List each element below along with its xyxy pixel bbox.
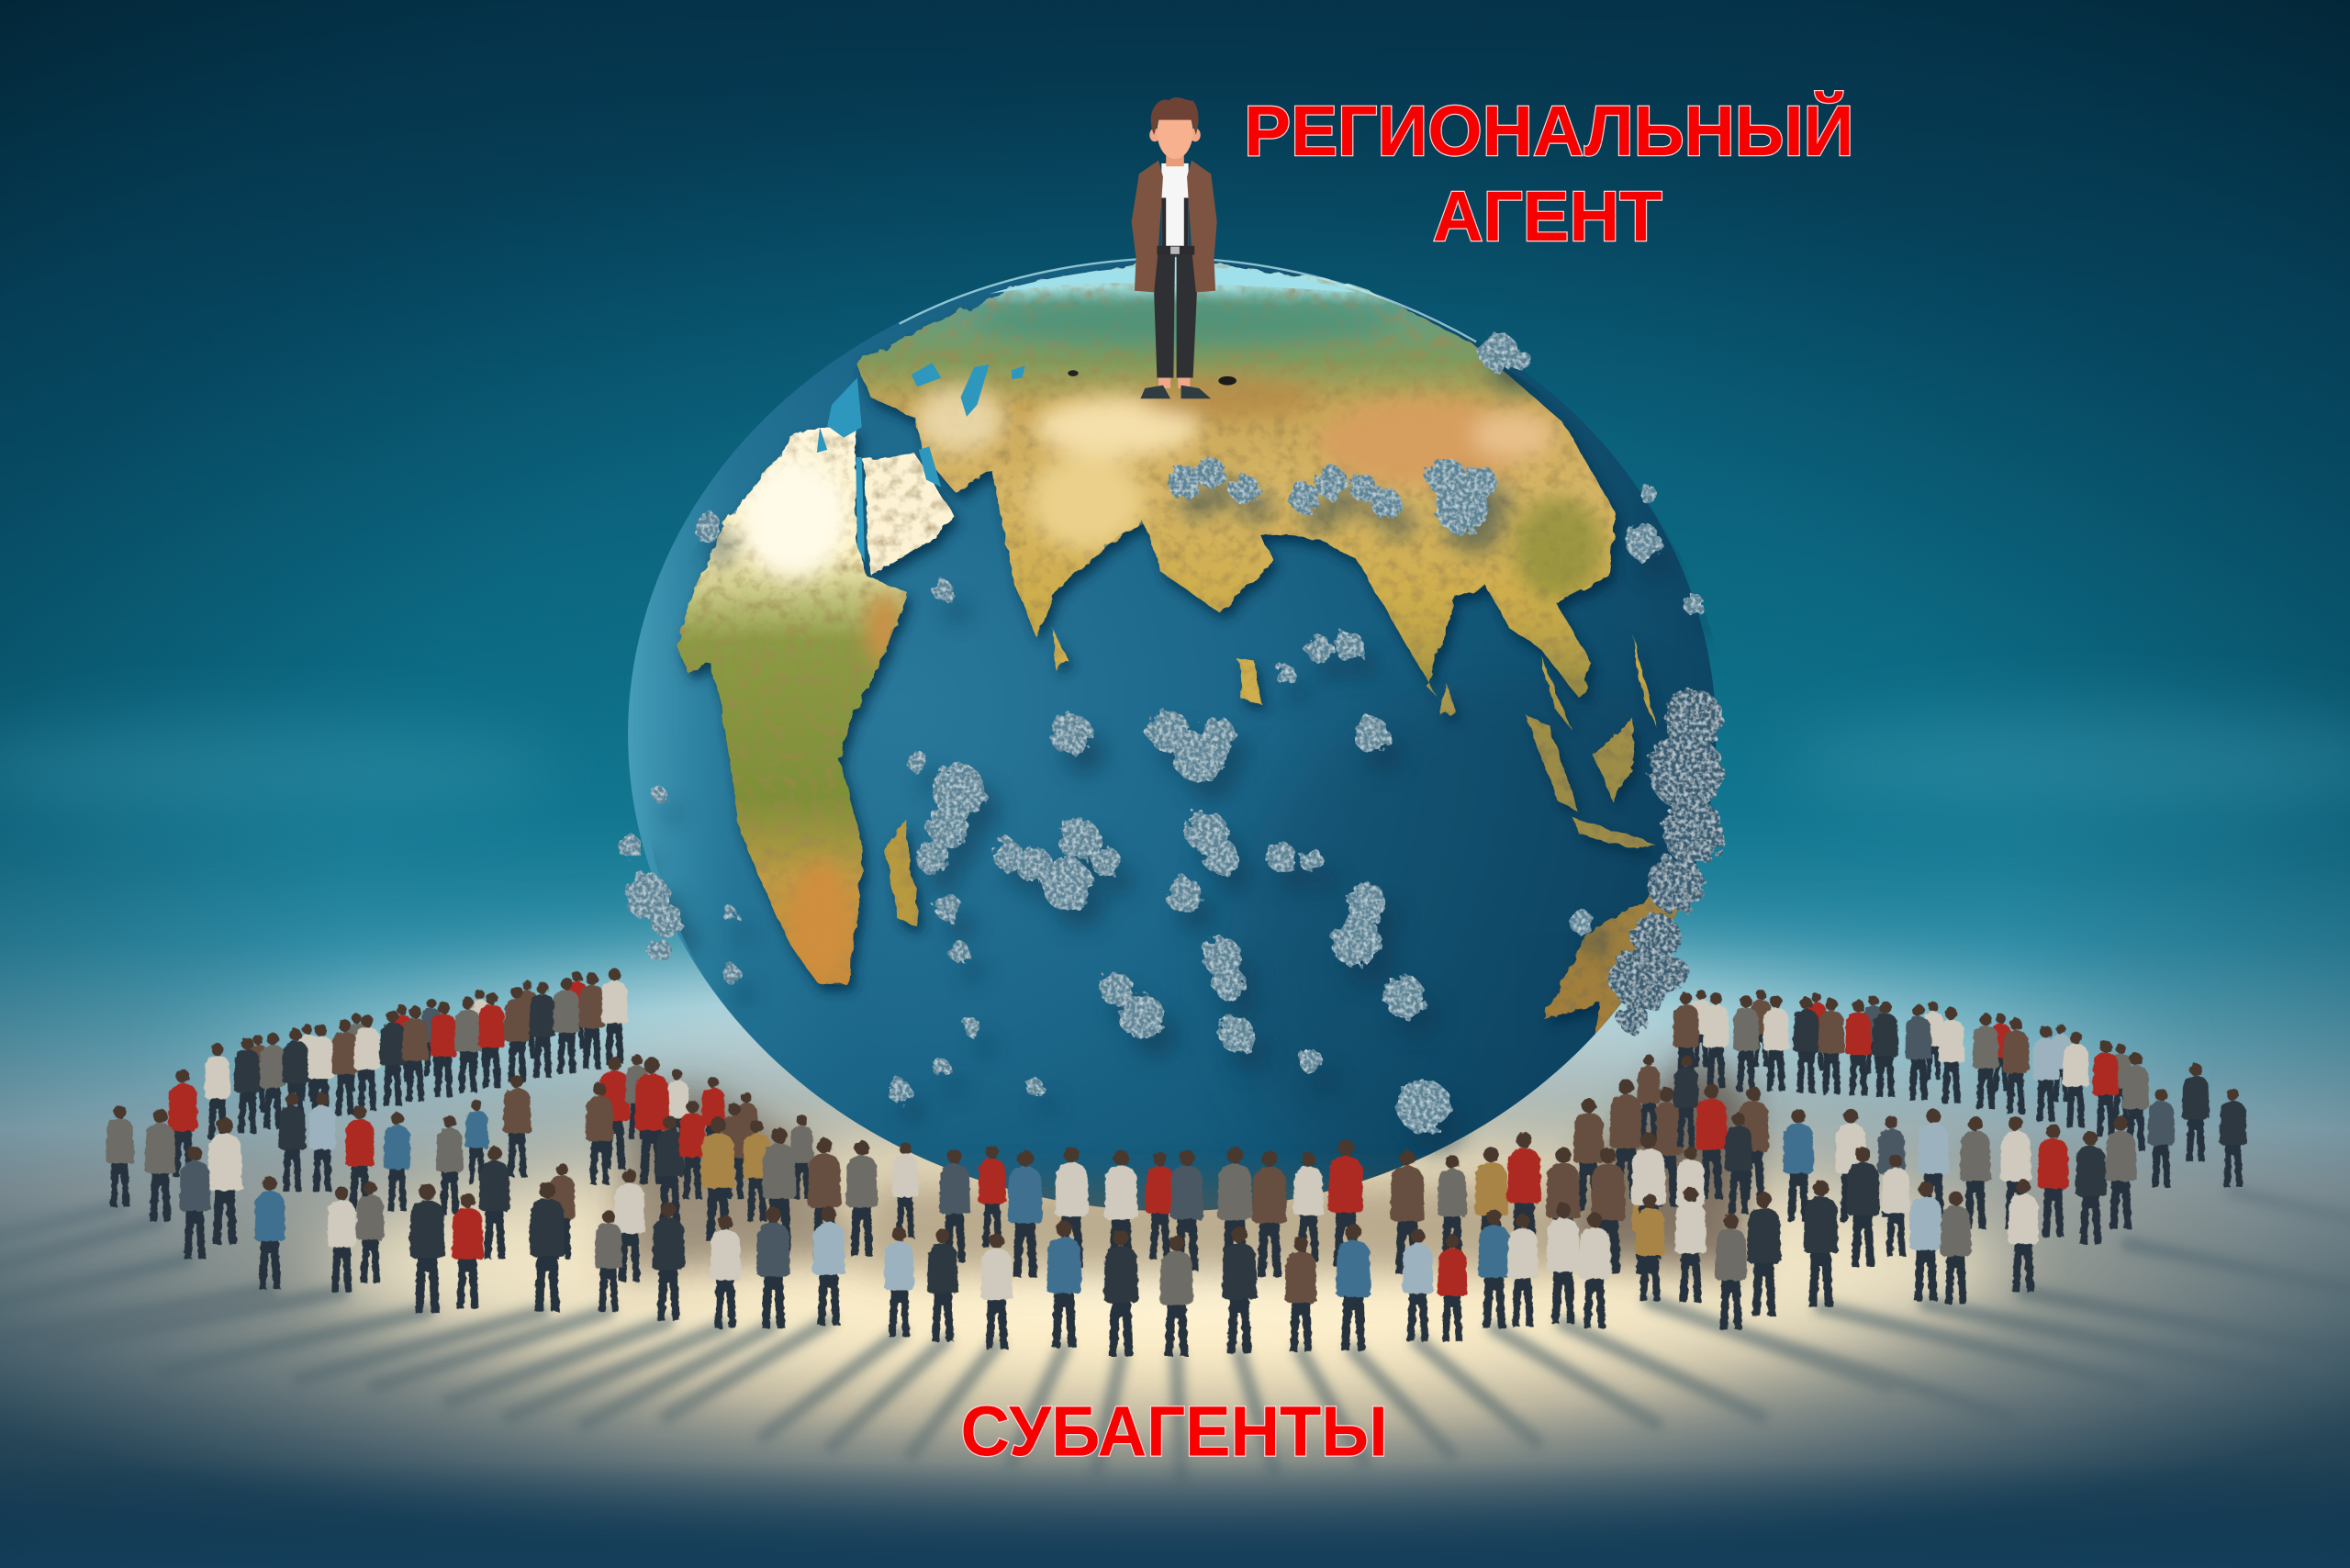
title: regional agent bbox=[1244, 92, 1854, 256]
front row bbox=[254, 1147, 2039, 1357]
jacket bbox=[1132, 161, 1217, 292]
back row right bbox=[1673, 992, 2247, 1187]
middle ring right bbox=[1573, 1055, 2136, 1274]
title: regional agent: АГЕНТ bbox=[1433, 178, 1662, 256]
Arabian peninsula bbox=[863, 454, 955, 576]
back row left bbox=[204, 969, 628, 1139]
globe bbox=[618, 258, 1798, 1244]
land colour patches Africa bbox=[741, 457, 902, 981]
Madagascar bbox=[884, 818, 920, 929]
clouds bbox=[618, 332, 1704, 1133]
belt bbox=[1157, 246, 1194, 255]
floor light pool under the crowd bbox=[330, 1154, 2009, 1379]
continents bbox=[676, 258, 1696, 1045]
rim clouds right bbox=[1609, 689, 1725, 1035]
dense crowd masses bbox=[614, 1049, 1753, 1274]
crowd of subagents bbox=[106, 969, 2247, 1357]
neck bbox=[1166, 150, 1184, 166]
title: regional agent: РЕГИОНАЛЬНЫЙ bbox=[1244, 92, 1854, 171]
suspenders bbox=[1161, 198, 1189, 249]
Africa bbox=[676, 429, 908, 986]
Eurasia bbox=[856, 258, 1616, 712]
top rim highlight bbox=[900, 258, 1476, 342]
sphere shading bbox=[1229, 675, 1798, 1244]
white shirt bbox=[1161, 163, 1189, 249]
globe sphere bbox=[628, 258, 1716, 1211]
Australia bbox=[1544, 877, 1682, 1045]
radial shadows of the crowd bbox=[0, 1192, 2350, 1476]
Indonesia islands bbox=[1526, 634, 1696, 855]
title: subagents: СУБАГЕНТЫ bbox=[961, 1393, 1388, 1471]
ice cap and inland seas bbox=[817, 266, 1357, 562]
land masses bbox=[676, 258, 1696, 1045]
middle ring left bbox=[106, 1055, 813, 1282]
cloud shadows bbox=[631, 353, 1718, 1153]
hair bbox=[1151, 97, 1199, 135]
Sri Lanka and small islands bbox=[1054, 630, 1457, 716]
far back row left bbox=[247, 971, 588, 1112]
land colour patches Eurasia bbox=[914, 300, 1604, 598]
inner ring around globe base bbox=[700, 1117, 1666, 1277]
regional agent figure bbox=[1132, 97, 1217, 398]
ankles and shoes bbox=[1158, 377, 1190, 388]
trousers bbox=[1153, 249, 1199, 377]
far back row right bbox=[1690, 990, 2132, 1121]
face bbox=[1157, 105, 1193, 159]
ears bbox=[1149, 129, 1201, 141]
